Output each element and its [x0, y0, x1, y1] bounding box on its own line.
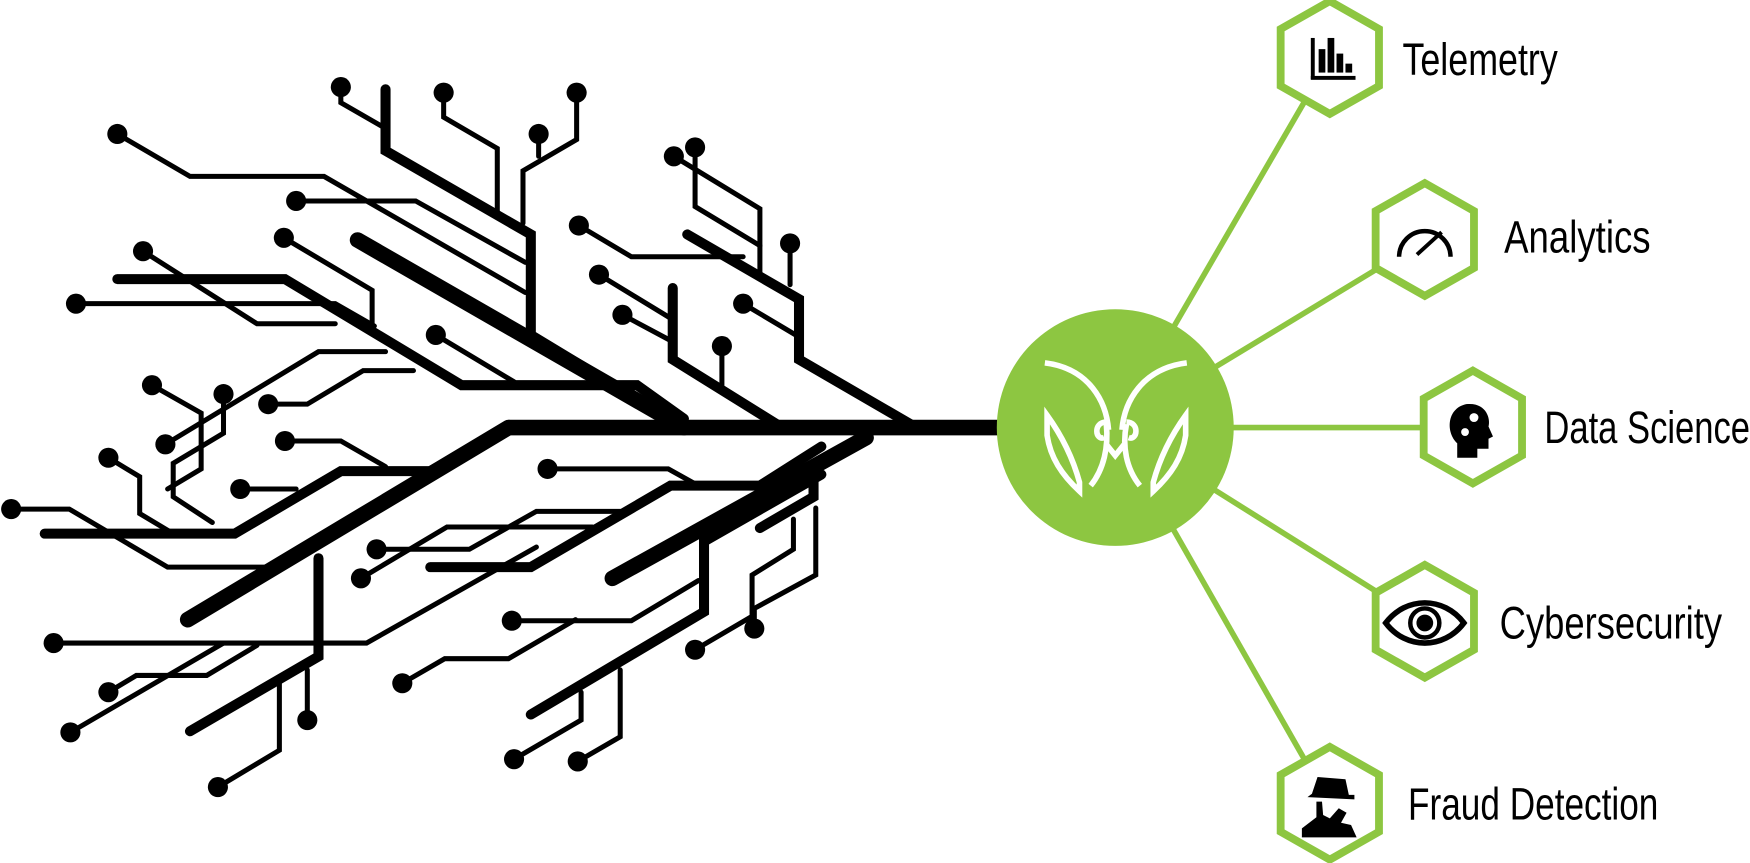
node: Telemetry [1281, 1, 1558, 114]
circuit tree [1, 77, 1000, 797]
node: Data Science [1424, 371, 1750, 483]
node: Cybersecurity [1376, 565, 1722, 678]
node: Analytics: Analytics [1504, 211, 1651, 262]
icon: eye [1386, 603, 1464, 643]
node: Fraud Detection: Fraud Detection [1408, 778, 1658, 829]
node: Fraud Detection [1281, 747, 1658, 860]
icon: head with gears [1450, 404, 1493, 458]
icon: gauge [1399, 231, 1451, 257]
icon: spy [1302, 777, 1357, 837]
icon: bar chart [1311, 38, 1356, 80]
green connector lines [1115, 58, 1473, 804]
node: Telemetry: Telemetry [1402, 34, 1558, 85]
central logo circle [997, 309, 1234, 546]
node: Analytics [1376, 183, 1651, 296]
